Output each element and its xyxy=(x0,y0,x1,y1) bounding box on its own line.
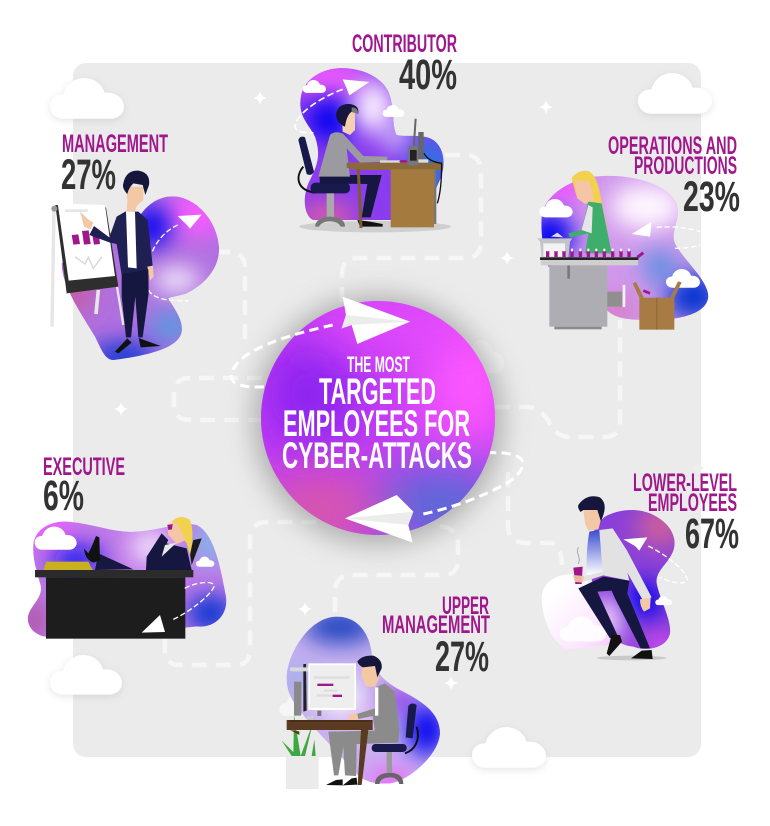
cloud: behind centre circle xyxy=(462,340,504,373)
cloud: top left xyxy=(50,78,124,121)
title: employees for: EMPLOYEES FOR xyxy=(283,403,470,444)
background panel xyxy=(73,63,701,757)
shadow xyxy=(597,656,667,660)
upper heading: UPPER xyxy=(442,592,489,620)
illustration: manager at computer xyxy=(279,610,447,790)
torso xyxy=(146,533,192,570)
plant pot xyxy=(286,757,319,789)
title: cyber-attacks: CYBER-ATTACKS xyxy=(282,435,472,476)
worker hair back xyxy=(572,171,607,230)
illustration: factory worker at machine xyxy=(538,170,708,330)
worker face xyxy=(575,180,594,204)
dashed connector paths xyxy=(165,155,620,665)
illustration: executive with feet on desk xyxy=(28,517,226,639)
bottles xyxy=(546,251,631,257)
panel: management xyxy=(50,134,219,360)
paper plane xyxy=(343,79,369,95)
bottle caps xyxy=(547,249,630,251)
worker coat xyxy=(568,202,612,253)
shoes xyxy=(115,338,161,353)
trousers xyxy=(578,577,650,648)
machine xyxy=(549,265,607,327)
sparkle stars xyxy=(114,91,705,690)
flip chart xyxy=(55,205,118,293)
head xyxy=(362,664,379,687)
cloud pair xyxy=(303,80,326,93)
cardboard box xyxy=(639,298,674,330)
jacket xyxy=(89,212,153,275)
clouds xyxy=(560,617,606,641)
keyboard and monitor xyxy=(380,160,400,163)
desk xyxy=(347,163,443,170)
executive percentage: 6% xyxy=(43,472,84,520)
circle with gradient xyxy=(261,301,495,535)
head xyxy=(583,508,602,531)
management heading: MANAGEMENT xyxy=(62,130,168,158)
trousers xyxy=(122,269,149,337)
chair xyxy=(406,704,417,738)
hand xyxy=(347,713,358,720)
monitor xyxy=(294,682,301,716)
plant xyxy=(282,715,316,756)
panel: lower-level employees xyxy=(542,469,739,660)
paper plane and trail xyxy=(623,537,647,551)
management heading: MANAGEMENT xyxy=(382,611,490,639)
coffee cup xyxy=(573,567,583,584)
shoes xyxy=(607,635,653,659)
desk xyxy=(35,570,193,577)
illustration: presenter at flip chart xyxy=(50,170,219,360)
clouds xyxy=(539,199,573,217)
panel: contributor xyxy=(287,30,457,232)
paper plane xyxy=(632,222,652,237)
clouds xyxy=(35,527,77,550)
head xyxy=(342,110,355,135)
hopper xyxy=(537,238,572,257)
illustration: walking employee with coffee xyxy=(542,496,687,660)
hair xyxy=(172,517,192,555)
conveyor xyxy=(540,257,638,260)
cloud: bottom left xyxy=(50,655,122,697)
arrow: bottom paper plane with dashed trail xyxy=(345,453,523,543)
paper plane xyxy=(178,215,202,229)
lower-level percentage: 67% xyxy=(685,510,739,558)
executive heading: EXECUTIVE xyxy=(43,453,125,481)
upper management percentage: 27% xyxy=(435,633,489,681)
contributor heading: CONTRIBUTOR xyxy=(352,30,457,58)
paper plane xyxy=(142,615,165,633)
contributor percentage: 40% xyxy=(399,51,457,99)
trousers xyxy=(328,730,399,776)
face xyxy=(167,523,186,544)
arrow: top paper plane with dashed trail xyxy=(231,297,410,387)
torso xyxy=(318,132,387,177)
head xyxy=(126,187,143,212)
chair back xyxy=(190,538,202,565)
title: the most: THE MOST xyxy=(347,352,410,377)
shirt xyxy=(583,528,652,600)
chest gradient patch xyxy=(587,529,603,575)
panel: central circle xyxy=(231,295,523,545)
legs xyxy=(319,175,382,217)
title: targeted: TARGETED xyxy=(319,371,436,412)
flip chart legs xyxy=(52,208,54,327)
shoes xyxy=(326,778,357,785)
torso xyxy=(357,683,399,732)
panel: upper management xyxy=(279,592,490,790)
panel: operations and productions xyxy=(527,132,740,330)
operations percentage: 23% xyxy=(683,173,740,221)
cloud: bottom centre xyxy=(472,727,546,770)
legs and feet xyxy=(95,553,133,570)
illustration: person at desk xyxy=(294,68,451,232)
panel: executive xyxy=(28,457,226,639)
white blob xyxy=(542,574,620,649)
cloud: top right xyxy=(638,73,712,116)
hand xyxy=(80,212,93,229)
folders on desk xyxy=(43,562,93,570)
background clouds xyxy=(50,73,712,770)
management percentage: 27% xyxy=(61,151,116,199)
chart bars xyxy=(72,230,100,245)
desk xyxy=(287,720,373,730)
circle shadow xyxy=(254,296,502,544)
chair xyxy=(298,137,314,175)
